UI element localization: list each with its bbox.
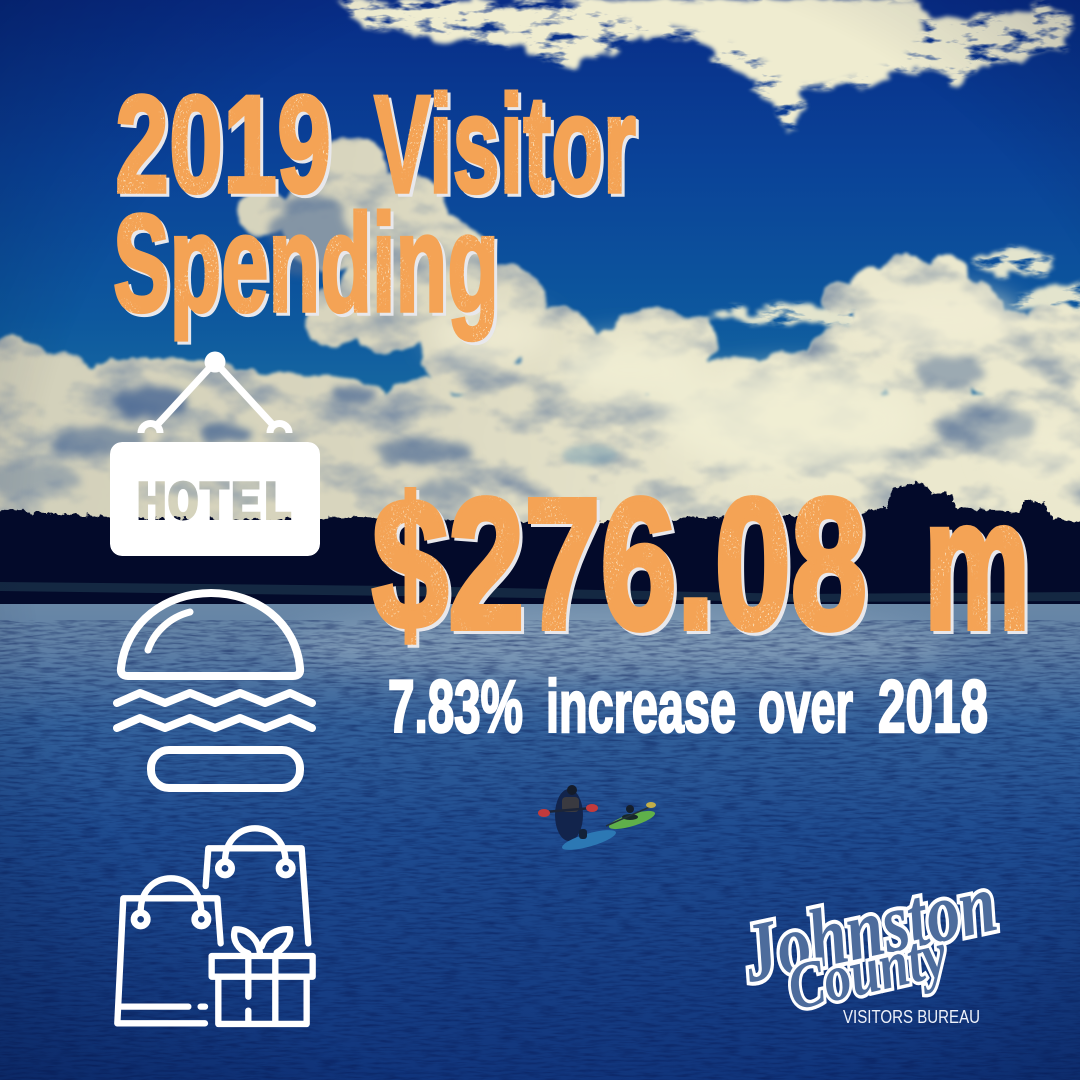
logo tagline: VISITORS BUREAU <box>843 1007 980 1027</box>
subtitle: 7.83% <box>388 665 523 748</box>
sky gap in clouds <box>562 445 618 465</box>
front bag <box>117 878 221 1023</box>
gift box <box>212 929 313 1024</box>
subtitle: over <box>758 665 853 748</box>
water ripples <box>0 620 1080 1080</box>
icon: hotel sign <box>110 352 320 556</box>
title line 1: Visitor <box>374 67 636 222</box>
sign board with HOTEL cut-out <box>110 442 320 556</box>
bun highlight <box>148 612 190 650</box>
subtitle <box>388 665 988 748</box>
cloud shadows <box>0 195 1035 500</box>
shoreline band <box>0 582 1080 602</box>
bottom bun <box>151 750 300 788</box>
tree line <box>0 482 1080 596</box>
subtitle: 2018 <box>878 665 988 748</box>
icon: burger <box>117 593 312 788</box>
kayak: rear dark boat and paddler <box>538 785 598 841</box>
logo word Johnston: Johnston <box>734 856 1004 1001</box>
small right cloud <box>700 249 1080 326</box>
subtitle: increase <box>546 665 736 748</box>
kayak: blue boat <box>560 826 618 854</box>
hanger <box>157 362 273 425</box>
lower wave <box>117 718 312 728</box>
logo word County: County <box>781 917 954 1025</box>
back bag <box>206 828 308 943</box>
top cloud: wispy edges <box>335 0 1075 130</box>
water reflection glow <box>280 609 960 681</box>
title line 2: Spending <box>113 186 499 341</box>
title <box>113 67 636 341</box>
shoreline dark strip <box>0 590 1080 604</box>
main figure <box>372 461 1030 668</box>
figure value: $276.08 <box>372 461 867 668</box>
logo: Johnston County Visitors Bureau <box>734 856 1004 1027</box>
top bun <box>121 593 300 676</box>
cloud mass <box>0 137 1080 525</box>
title line 1 <box>115 67 636 222</box>
cloud highlights <box>430 290 1080 480</box>
sky <box>0 0 1080 530</box>
hanger nail <box>204 352 226 372</box>
top cloud: solid core <box>560 0 925 88</box>
kayakers <box>538 785 657 854</box>
right hook <box>270 424 289 433</box>
water <box>0 600 1080 1080</box>
upper wave <box>117 693 312 703</box>
icon: shopping bags and gift <box>117 828 313 1024</box>
left hook <box>141 424 160 433</box>
kayak: green boat <box>606 802 657 833</box>
title line 1: 2019 <box>115 67 331 222</box>
